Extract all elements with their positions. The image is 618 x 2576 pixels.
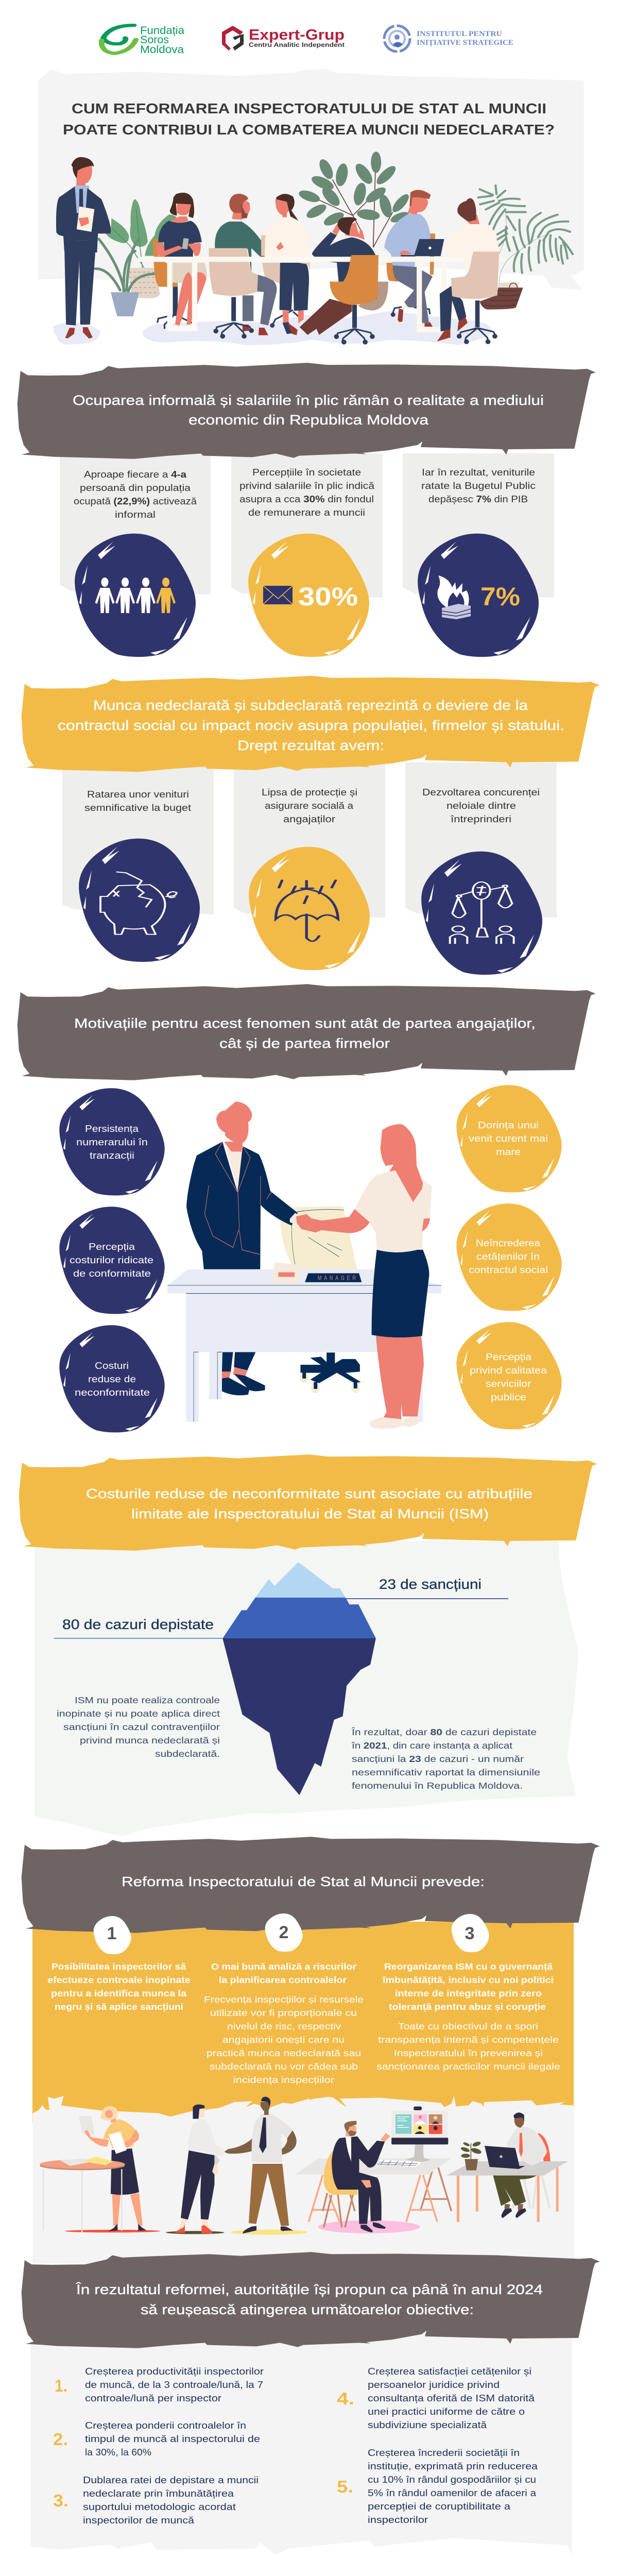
panel: iceberg background [35, 1541, 578, 1836]
orange chair over table [330, 255, 379, 305]
circle: high compliance costs [59, 1207, 165, 1314]
objective 1 [55, 2366, 264, 2403]
text: card budget losses [421, 467, 536, 504]
step 3: sancționarea practicilor muncii ilegale [376, 2061, 560, 2072]
title [63, 100, 555, 138]
meeting table left part [138, 257, 319, 331]
objective 3: nedeclarate prin îmbunătățirea [83, 2488, 234, 2499]
text: result figures: În rezultat, doar 80 de cazuri depistate [351, 1727, 537, 1737]
office chair base [300, 1352, 361, 1393]
band: objectives heading: În rezultatul reformei, autoritățile își propun ca până în anul 2024 [76, 2281, 543, 2297]
objective 4: persoanelor juridice privind [368, 2379, 500, 2390]
step 3: toleranță pentru abuz și corupție [389, 2002, 546, 2012]
circle: cash persistence: Persistența [85, 1124, 139, 1134]
objective 4: subdiviziune specializată [368, 2419, 487, 2430]
objective 4 [337, 2366, 535, 2430]
objective 1: Creșterea productivității inspectorilor [85, 2366, 264, 2377]
icon: four people circle [75, 534, 196, 657]
circle: high compliance costs: de conformitate [73, 1268, 151, 1279]
plant with round leaves [297, 151, 411, 247]
circle: cash persistence: tranzacții [90, 1150, 134, 1161]
objective 5 [337, 2447, 538, 2525]
circle: public service quality: privind calitatea [470, 1365, 547, 1376]
step 3: transparența internă și competențele [378, 2035, 559, 2045]
step 3: Reorganizarea ISM cu o guvernanță [384, 1961, 553, 1972]
text: missed revenue: semnificative la buget [84, 802, 191, 813]
circle: public service quality: serviciilor [486, 1379, 531, 1389]
band: compliance costs heading: Costurile reduse de neconformitate sunt asociate cu atribuțiile [86, 1486, 533, 1501]
band: undeclared work heading [22, 676, 600, 772]
circle: cash persistence: numerarului în [76, 1137, 148, 1147]
table with laptop man [447, 2112, 568, 2222]
nameplate and card [272, 1262, 362, 1283]
step 1: negru și să aplice sancțiuni [55, 2002, 183, 2012]
logo: Institutul pentru Inițiative Strategice: INIȚIATIVE STRATEGICE [417, 39, 513, 47]
band: informal employment heading [18, 363, 596, 459]
illustration: people at work right [280, 2107, 568, 2234]
band: compliance costs heading: limitate ale Inspectoratului de Stat al Muncii (ISM) [131, 1506, 489, 1521]
band: objectives heading: să reușească atingerea următoarelor obiective: [141, 2302, 474, 2317]
band: motivations heading: Motivațiile pentru acest fenomen sunt atât de partea angajaților, [74, 1015, 536, 1031]
chart: iceberg [222, 1562, 376, 1795]
objective 2: 2. [53, 2430, 68, 2449]
objective 4: 4. [337, 2389, 354, 2408]
round table [40, 2157, 125, 2232]
circle: distrust in social contract: cetățenilor în [476, 1251, 540, 1262]
logo: Expert-Grup: Centru Analitic Independent [249, 41, 345, 48]
man in navy suit [186, 1101, 298, 1395]
text: card budget losses: depășesc 7% din PIB [428, 494, 528, 504]
text: unfair competition: întreprinderi [450, 814, 511, 824]
objective 3: Dublarea ratei de depistare a muncii [83, 2475, 259, 2485]
woman in skirt [296, 1124, 432, 1429]
text: result figures: sancțiuni la 23 de cazuri - un număr [352, 1754, 524, 1764]
woman one [152, 193, 207, 329]
basket [479, 282, 523, 310]
icon: envelope 30 percent circle [248, 534, 369, 657]
objective 5: instituție, exprimată prin reducerea [368, 2461, 538, 2471]
step 2: O mai bună analiză a riscurilor [211, 1961, 356, 1972]
text: card informal employment: informal [115, 509, 156, 520]
objective 2: Creșterea ponderii controalelor în [85, 2420, 246, 2431]
label: 80 detected cases: 80 de cazuri depistate [62, 1617, 214, 1632]
text: card envelope wages: Percepțiile în societate [252, 467, 361, 478]
objective 5: Creșterea încrederii societății în [368, 2447, 520, 2458]
logo: Expert-Grup [222, 26, 345, 50]
desk with monitor and bearded man [295, 2107, 452, 2232]
circle: higher income wish: venit curent mai [469, 1133, 548, 1144]
step 3: Toate cu obiectivul de a spori [398, 2021, 538, 2031]
band: reform heading [22, 1837, 600, 1933]
text: unfair competition [422, 787, 540, 824]
title: POATE CONTRIBUI LA COMBATEREA MUNCII NEDECLARATE? [63, 122, 555, 138]
title: CUM REFORMAREA INSPECTORATULUI DE STAT AL MUNCII [72, 100, 546, 116]
circle: higher income wish [456, 1085, 562, 1192]
band: motivations heading [18, 984, 596, 1080]
woman reading papers [79, 2106, 147, 2231]
step 2: practică munca nedeclarată sau [207, 2048, 361, 2058]
step 1: Posibilitatea inspectorilor să [52, 1961, 186, 1972]
fern plant [478, 185, 573, 282]
logo: Expert-Grup: Expert-Grup [249, 27, 345, 43]
panel: reform yellow background [32, 1922, 574, 2123]
objective 5: inspectorilor [368, 2514, 428, 2525]
panel: employer motivations [59, 1088, 165, 1432]
objective 4: Creșterea satisfacției cetățenilor și [368, 2366, 531, 2377]
text: missed revenue [84, 789, 191, 813]
step 2 [204, 1913, 364, 2085]
objective 4: consultanța oferită de ISM datorită [368, 2393, 535, 2403]
text: lack of protection: asigurare socială a [265, 800, 354, 811]
band: informal employment heading: economic din Republica Moldova [188, 412, 429, 428]
circle: public service quality [456, 1322, 562, 1429]
icon: number 1: 1 [107, 1924, 116, 1943]
text: ISM limits: privind munca nedeclarată și [80, 1735, 220, 1745]
text: lack of protection [262, 787, 357, 824]
icon: number 2 [265, 1913, 303, 1952]
step 1: pentru a identifica munca la [51, 1988, 186, 1998]
logo: Institutul pentru Inițiative Strategice [384, 26, 513, 52]
man in blue shirt with laptop [384, 190, 444, 327]
step 2: la planificarea controalelor [219, 1975, 347, 1985]
panel: second section cards [62, 762, 557, 918]
step 2: subdeclarată nu vor cădea sub [210, 2061, 358, 2072]
circle: higher income wish: Dorința unui [478, 1120, 539, 1130]
man in cream shirt from back [437, 198, 499, 344]
objective 5: 5. [337, 2477, 353, 2496]
text: ISM limits: ISM nu poate realiza controale [75, 1695, 220, 1705]
band: motivations heading: cât și de partea firmelor [219, 1036, 390, 1051]
text: ISM limits [57, 1695, 220, 1759]
objective 5: cu 10% în rândul gospodăriilor și cu [368, 2474, 536, 2485]
band: undeclared work heading: Munca nedeclarată și subdeclarată reprezintă o deviere de la [93, 698, 528, 713]
text: lack of protection: angajaților [283, 814, 335, 824]
icon: number 3 [452, 1914, 489, 1952]
illustration: handshake at manager desk [167, 1101, 441, 1429]
step 2: angajatorii onești care nu [222, 2035, 345, 2045]
illustration: office meeting team [53, 151, 573, 345]
band: compliance costs heading [19, 1454, 597, 1551]
objective 1: controale/lună per inspector [85, 2393, 221, 2403]
objective 4: unei practici uniforme de către o [368, 2406, 525, 2417]
icon: number 1 [94, 1916, 131, 1954]
text: card informal employment: ocupată (22,9%) activează [74, 496, 197, 506]
text: card envelope wages: de remunerare a muncii [248, 507, 365, 518]
step 2: Frecvența inspecțiilor și resursele [204, 1994, 364, 2005]
band: informal employment heading: Ocuparea informală și salariile în plic rămân o realitate a mediului [73, 393, 544, 408]
text: result figures [351, 1727, 540, 1791]
circle: high compliance costs: Percepția [89, 1242, 135, 1252]
objective 3: inspectorilor de muncă [83, 2515, 195, 2526]
objective 1: de muncă, de la 3 controale/lună, la 7 [85, 2379, 263, 2390]
icon: number 3: 3 [465, 1924, 474, 1943]
objective 3: 3. [53, 2491, 68, 2510]
man in green seen from back [209, 194, 283, 338]
objective 5: 5% în rândul oamenilor de afaceri a [368, 2487, 537, 2498]
label: 23 sanctions: 23 de sancțiuni [379, 1577, 482, 1592]
circle: public service quality: Percepția [486, 1352, 532, 1362]
text: ISM limits: subdeclarată. [155, 1749, 220, 1759]
objective 5: percepției de coruptibilitate a [368, 2501, 511, 2512]
objective 2: timpul de muncă al inspectorului de [85, 2433, 260, 2444]
logo: Fundația Soros Moldova [101, 25, 184, 56]
logo: Fundația Soros Moldova: Moldova [140, 44, 184, 56]
panel: hero background [38, 69, 584, 290]
man with tie [224, 2097, 297, 2233]
nameplate and card: MANAGER [318, 1275, 356, 1282]
text: unfair competition: neloiale dintre [447, 800, 516, 811]
text: unfair competition: Dezvoltarea concurenței [422, 787, 540, 798]
logo: Institutul pentru Inițiative Strategice: INSTITUTUL PENTRU [417, 30, 502, 38]
panel: objectives background [31, 2284, 572, 2555]
text: card informal employment [74, 469, 197, 520]
step 2: utilizate vor fi proporționale cu [210, 2008, 357, 2018]
icon: broken piggy bank [79, 839, 200, 962]
circle: distrust in social contract: Neîncrederea [476, 1238, 541, 1248]
circle: public service quality: publice [491, 1392, 526, 1402]
icon: envelope 30 percent circle: 30% [298, 582, 358, 611]
circle: higher income wish: mare [496, 1147, 521, 1157]
panel: first section stat cards [60, 453, 554, 598]
step 3: interne de integritate prin zero [395, 1988, 542, 1998]
text: card envelope wages: privind salariile în plic indică [239, 480, 375, 491]
band: undeclared work heading: contractul social cu impact nociv asupra populației, firmelor și statului. [58, 718, 564, 733]
circle: distrust in social contract: contractul social [469, 1265, 548, 1275]
circle: low non-compliance costs: Costuri [95, 1361, 129, 1371]
circle: high compliance costs: costurilor ridicate [70, 1255, 153, 1265]
man leaning back on orange chair [300, 217, 388, 345]
objective 2: la 30%, la 60% [85, 2447, 151, 2458]
objective 3 [53, 2475, 259, 2526]
text: ISM limits: inopinate și nu poate aplica direct [57, 1708, 220, 1719]
logos row [101, 25, 513, 56]
circle: cash persistence [59, 1088, 165, 1195]
logo: Fundația Soros Moldova: Fundația [140, 25, 184, 37]
illustration: right half of meeting [297, 151, 573, 345]
circle: low non-compliance costs: neconformitate [75, 1387, 150, 1398]
icon: umbrella with rain [249, 847, 370, 970]
circle: low non-compliance costs [59, 1325, 165, 1432]
panel: reform illustration background [32, 2096, 574, 2263]
text: result figures: în 2021 , din care instanța a aplicat [351, 1740, 512, 1751]
step 2: incidența inspecțiilor [233, 2075, 334, 2085]
text: lack of protection: Lipsa de protecție și [262, 787, 357, 798]
woman trousers continued [299, 263, 309, 311]
objective 3: suportului metodologic acordat [83, 2501, 236, 2512]
step 3: Inspectoratului în prevenirea și [394, 2048, 543, 2058]
text: card envelope wages: asupra a cca 30% din fondul [239, 494, 374, 504]
panel: employee motivations [456, 1085, 562, 1429]
band: undeclared work heading: Drept rezultat avem: [237, 738, 384, 753]
woman in cream blouse [261, 194, 309, 335]
step 3: îmbunătățită, inclusiv cu noi politici [382, 1975, 554, 1985]
illustration: people at work left [40, 2097, 307, 2235]
step 2: nivelul de risc, respectiv [227, 2021, 341, 2031]
text: card envelope wages [239, 467, 375, 518]
icon: scales with two people [421, 852, 542, 975]
text: missed revenue: Ratarea unor venituri [87, 789, 189, 800]
icon: burning money 7 percent circle [418, 534, 539, 657]
logo: Fundația Soros Moldova: Soros [140, 34, 169, 46]
desk [167, 1269, 441, 1422]
text: card budget losses: ratate la Bugetul Public [421, 480, 536, 491]
text: result figures: fenomenului în Republica Moldova. [352, 1781, 523, 1791]
step 3 [376, 1914, 560, 2072]
text: result figures: nesemnificativ raportat la dimensiunile [352, 1767, 540, 1777]
meeting table right part [299, 257, 505, 332]
objective 2 [53, 2420, 260, 2458]
illustration: left half of meeting [53, 157, 319, 345]
band: objectives heading [22, 2252, 600, 2348]
text: card informal employment: Aproape fiecare a 4-a [84, 469, 187, 480]
text: ISM limits: sancțiuni în cazul contravențiilor [63, 1722, 220, 1732]
icon: number 2: 2 [279, 1923, 288, 1942]
text: card informal employment: persoană din populația [80, 482, 191, 493]
circle: distrust in social contract [456, 1204, 562, 1311]
objective 1: 1. [55, 2376, 67, 2395]
circle: low non-compliance costs: reduse de [88, 1374, 136, 1384]
icon: burning money 7 percent circle: 7% [480, 582, 520, 611]
step 1 [47, 1916, 191, 2012]
text: card budget losses: Iar în rezultat, veniturile [422, 467, 535, 478]
woman shaking hands [176, 2105, 224, 2233]
step 1: efectueze controale inopinate [47, 1975, 191, 1985]
band: reform heading: Reforma Inspectoratului de Stat al Muncii prevede: [122, 1874, 485, 1889]
